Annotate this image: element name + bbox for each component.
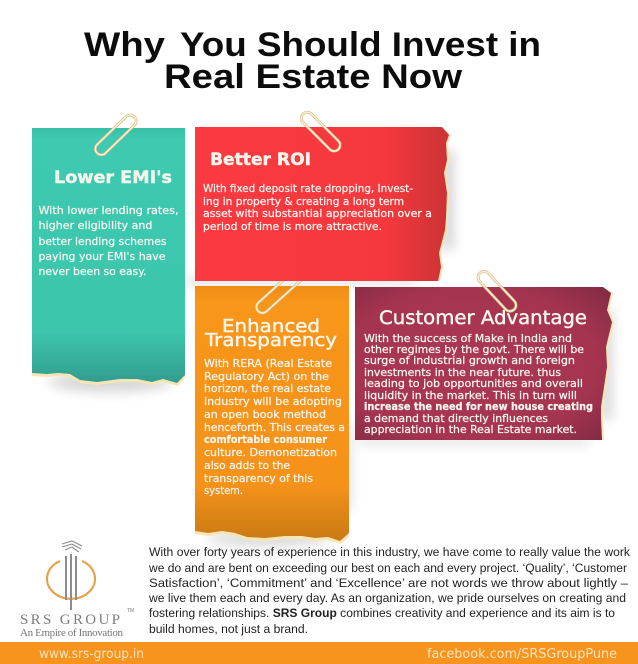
text: Customer Advantage body: surge of industrial growth and foreign (364, 355, 575, 367)
text: Enhanced Transparency body: Regulatory Act) on the (204, 371, 329, 383)
text: Lower EMI's body: With lower lending rates, (38, 205, 178, 217)
text: Customer Advantage body: investments in the near future. thus (364, 367, 561, 379)
text block: company description: fostering relationships. SRS Group combines creativity and experience and its aim is to (149, 606, 615, 620)
text: Enhanced Transparency body: transparency of this (204, 473, 313, 485)
text: Customer Advantage body (364, 333, 593, 436)
text: Enhanced Transparency body: an open book method (204, 409, 326, 421)
text block: company description (148, 545, 631, 636)
text: Customer Advantage body: a demand that directly influences (364, 413, 548, 425)
icon: paperclip Enhanced Transparency (254, 265, 308, 315)
panel: Lower EMI's (32, 128, 185, 386)
panel: Customer Advantage (355, 287, 614, 440)
text: Lower EMI's body: higher eligibility and (38, 220, 152, 232)
text: Enhanced Transparency body (204, 358, 345, 497)
title: Real Estate Now (164, 58, 463, 96)
icon: logo ring (47, 561, 95, 599)
text: Lower EMI's body: better lending schemes (38, 236, 166, 248)
icon: paperclip Better ROI (299, 110, 343, 154)
text: Customer Advantage body: leading to job opportunities and overall (364, 378, 583, 390)
text: Customer Advantage body: appreciation in the Real Estate market. (364, 424, 577, 436)
text: Customer Advantage body: liquidity in the market. This in turn will (364, 390, 577, 402)
heading: Enhanced Transparency (204, 316, 337, 351)
heading: Enhanced Transparency: Transparency (204, 330, 337, 351)
text: Better ROI body: period of time is more attractive. (203, 221, 382, 233)
footer website: www.srs-group.in (39, 647, 144, 662)
panel: Enhanced Transparency (195, 286, 349, 544)
logo wordmark: SRS GROUP (20, 612, 120, 628)
card shadows (48, 150, 612, 546)
panel: Better ROI (195, 127, 451, 281)
text: Customer Advantage body: With the success of Make in India and (364, 333, 572, 345)
text: Better ROI body (203, 183, 432, 233)
icon: logo pillars (62, 541, 82, 610)
text block: company description: build homes, not just a brand. (149, 622, 308, 636)
title: You Should Invest in (180, 26, 541, 64)
text: Customer Advantage body: other regimes by the govt. There will be (364, 344, 584, 356)
text: Lower EMI's body (38, 205, 178, 278)
icon: paperclip Customer Advantage (476, 269, 518, 314)
logo: SRS Group (20, 541, 134, 639)
text: Enhanced Transparency body: also adds to the (204, 460, 290, 472)
text: Customer Advantage body: increase the need for new house creating (364, 401, 593, 413)
text block: company description: we live them each and every day. As an organization, we pride ourselves on creating and (148, 591, 626, 605)
text block: company description: With over forty years of experience in this industry, we have come to really value the work (149, 545, 631, 559)
title (84, 26, 541, 96)
text: Better ROI body: asset with substantial appreciation over a (203, 208, 432, 220)
heading: Customer Advantage: Customer Advantage (379, 307, 587, 329)
icon: paperclip Lower EMI's (93, 113, 139, 157)
text: Enhanced Transparency body: horizon, the real estate (204, 383, 331, 395)
heading: Enhanced Transparency: Enhanced (222, 316, 320, 337)
text: Enhanced Transparency body: comfortable consumer (204, 434, 328, 446)
text block: company description: we do and are bent on exceeding our best on each and every project. ‘Quality’, ‘Customer (148, 561, 627, 575)
text: Better ROI body: With fixed deposit rate dropping, Invest- (203, 183, 413, 195)
text: Enhanced Transparency body: culture. Demonetization (204, 447, 337, 459)
text: Lower EMI's body: never been so easy. (38, 266, 146, 278)
text: Enhanced Transparency body: system. (204, 485, 243, 497)
title: Why (84, 26, 165, 64)
text: Lower EMI's body: paying your EMI's have (38, 251, 166, 263)
text: Enhanced Transparency body: industry will be adopting (204, 396, 342, 408)
text: Enhanced Transparency body: henceforth. This creates a (204, 422, 345, 434)
heading: Lower EMI's: Lower EMI's (54, 168, 172, 188)
text: Better ROI body: ing in property & creating a long term (203, 196, 404, 208)
text: Enhanced Transparency body: With RERA (Real Estate (204, 358, 332, 370)
logo tagline: An Empire of Innovation (20, 627, 124, 639)
logo trademark: TM (127, 608, 134, 614)
text block: company description: Satisfaction’, ‘Commitment’ and ‘Excellence’ are not words we throw about lightly – (149, 576, 628, 590)
footer facebook: facebook.com/SRSGroupPune (427, 647, 617, 662)
footer bar (0, 642, 638, 664)
heading: Better ROI: Better ROI (210, 150, 311, 170)
